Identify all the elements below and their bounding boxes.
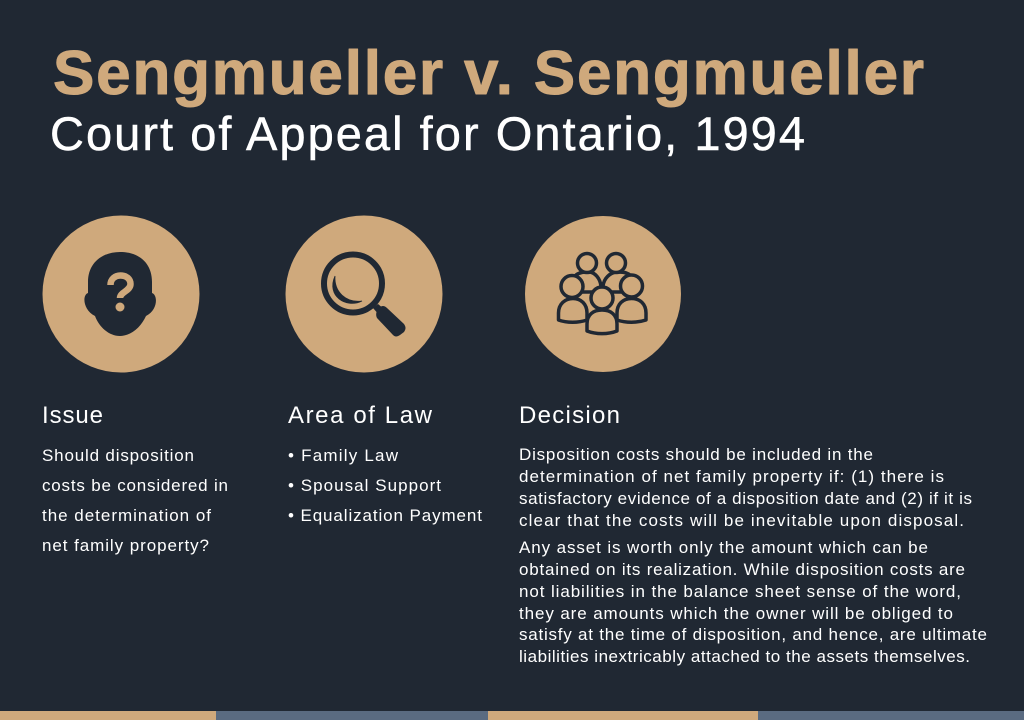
icon: head with question mark (42, 216, 200, 372)
text: decision second paragraph: they are amounts which the owner will be obliged to (519, 604, 953, 623)
column: decision (519, 216, 987, 666)
text: decision second paragraph: not liabilities in the balance sheet sense of the word, (519, 582, 961, 601)
list: areas of law: • Spousal Support (288, 476, 441, 495)
footer colour bar (0, 711, 1024, 720)
text: issue question: net family property? (42, 536, 209, 555)
column: area of law (286, 216, 482, 525)
icon: group of people (525, 216, 681, 372)
text: issue question: Should disposition (42, 446, 194, 465)
heading: area of law: Area of Law (288, 402, 433, 429)
text: issue question: the determination of (42, 506, 211, 525)
text: decision second paragraph: Any asset is worth only the amount which can be (519, 538, 928, 557)
icon: magnifying glass (286, 216, 442, 372)
list: areas of law: • Family Law (288, 446, 399, 465)
text: decision first paragraph (519, 445, 972, 530)
text: decision first paragraph: Disposition costs should be included in the (519, 445, 873, 464)
text: issue question: costs be considered in (42, 476, 228, 495)
text: issue question (42, 446, 228, 555)
text: decision second paragraph (519, 538, 987, 666)
list: areas of law: • Equalization Payment (288, 506, 482, 525)
subtitle: Court of Appeal for Ontario, 1994 (50, 107, 805, 160)
list: areas of law (288, 446, 482, 525)
text: decision second paragraph: obtained on its realization. While disposition costs are (519, 560, 965, 579)
text: decision second paragraph: satisfy at the time of disposition, and hence, are ultimate (519, 625, 987, 644)
column: issue (42, 216, 228, 555)
title: Sengmueller v. Sengmueller (53, 39, 924, 108)
heading: decision: Decision (519, 402, 620, 429)
text: decision first paragraph: determination of net family property if: (1) there is (519, 467, 944, 486)
heading: issue: Issue (42, 402, 103, 429)
text: decision first paragraph: satisfactory evidence of a disposition date and (2) if it is (519, 489, 972, 508)
text: decision second paragraph: liabilities inextricably attached to the assets themselves. (519, 647, 970, 666)
text: decision first paragraph: clear that the costs will be inevitable upon disposal. (519, 511, 964, 530)
